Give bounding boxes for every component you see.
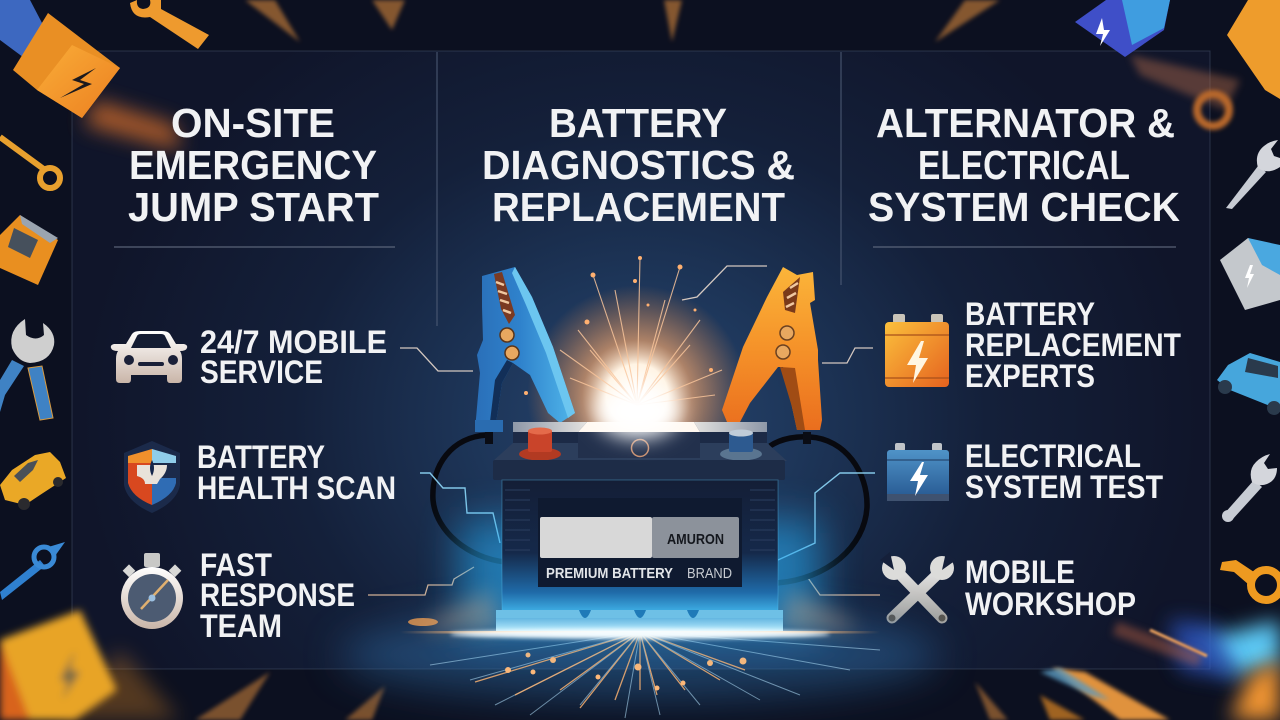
edge icons: left bbox=[0, 0, 209, 720]
icon: orange battery bbox=[885, 314, 949, 387]
heading: alternator and electrical system check: ELECTRICAL bbox=[918, 142, 1130, 188]
heading: on-site emergency jump start: JUMP START bbox=[128, 184, 379, 230]
text: fast response team: RESPONSE bbox=[200, 577, 355, 613]
heading: battery diagnostics and replacement: BATTERY bbox=[549, 100, 727, 146]
clamp: orange bbox=[722, 267, 822, 444]
battery center cap bbox=[578, 422, 700, 458]
text: 24/7 mobile service: 24/7 MOBILE bbox=[200, 324, 387, 360]
icon: key wrench bbox=[0, 137, 60, 188]
left feature list bbox=[111, 324, 396, 644]
bottom glow bbox=[408, 520, 860, 635]
battery label bbox=[540, 517, 739, 558]
text: mobile workshop: WORKSHOP bbox=[965, 586, 1136, 622]
battery brand text: PREMIUM BATTERY bbox=[546, 565, 673, 582]
icon: blue car bbox=[1217, 353, 1280, 415]
text: battery replacement experts bbox=[965, 296, 1181, 394]
icon: stopwatch bbox=[121, 553, 183, 629]
heading: battery diagnostics and replacement bbox=[482, 100, 795, 230]
battery brand text: BRAND bbox=[687, 565, 732, 582]
battery base bbox=[496, 610, 783, 632]
text: battery replacement experts: REPLACEMENT bbox=[965, 327, 1181, 363]
icon: orange ring wrench bbox=[1220, 560, 1280, 600]
icon: battery bbox=[1220, 238, 1280, 310]
edge icons: right bbox=[1075, 0, 1280, 600]
battery top blocks bbox=[493, 422, 787, 461]
icon: yellow car bbox=[0, 452, 66, 510]
icon: handheld tester bbox=[0, 215, 58, 285]
heading: on-site emergency jump start: ON-SITE bbox=[171, 100, 335, 146]
battery terminal: negative bbox=[720, 430, 762, 460]
text: mobile workshop bbox=[965, 554, 1136, 622]
column dividers bbox=[114, 52, 1176, 326]
glow base line bbox=[400, 629, 880, 639]
right feature list bbox=[880, 296, 1181, 622]
text: battery health scan: HEALTH SCAN bbox=[197, 470, 396, 506]
heading: alternator and electrical system check: SYSTEM CHECK bbox=[868, 184, 1180, 230]
heading: on-site emergency jump start bbox=[128, 100, 379, 230]
icon: orange box bbox=[1227, 0, 1280, 99]
circuit traces bbox=[368, 266, 880, 595]
text: fast response team: FAST bbox=[200, 547, 272, 583]
text: electrical system test: SYSTEM TEST bbox=[965, 469, 1163, 505]
icon: blurred ring bbox=[1197, 94, 1229, 126]
icon: wrench lower bbox=[1222, 454, 1277, 522]
icon: blue block bbox=[0, 0, 52, 66]
battery label panel bbox=[538, 498, 742, 587]
floor sparks bbox=[340, 610, 940, 718]
icon: car bbox=[111, 331, 187, 383]
text: mobile workshop: MOBILE bbox=[965, 554, 1075, 590]
text: battery health scan: BATTERY bbox=[197, 439, 325, 475]
flash core bbox=[596, 386, 680, 438]
icon: wrench top bbox=[130, 0, 209, 49]
heading: alternator and electrical system check: ALTERNATOR & bbox=[876, 100, 1175, 146]
battery lid bbox=[493, 460, 785, 480]
cables bbox=[433, 435, 867, 583]
text: battery replacement experts: BATTERY bbox=[965, 296, 1095, 332]
icon: blue battery bbox=[887, 443, 949, 501]
heading: battery diagnostics and replacement: DIAGNOSTICS & bbox=[482, 142, 795, 188]
sparks bbox=[524, 256, 747, 505]
central panel bbox=[72, 51, 1210, 669]
heading: on-site emergency jump start: EMERGENCY bbox=[129, 142, 377, 188]
icon: blue box bbox=[1075, 0, 1170, 57]
text: fast response team bbox=[200, 547, 355, 644]
icon: crossed tools bbox=[880, 552, 956, 622]
icon: blurred box bbox=[0, 610, 117, 720]
battery terminal: positive bbox=[519, 428, 561, 460]
battery label: AMURON bbox=[667, 531, 724, 548]
text: 24/7 mobile service: SERVICE bbox=[200, 354, 323, 390]
icon: wrench upper bbox=[1226, 140, 1280, 209]
icon: shield bbox=[124, 441, 180, 513]
text: fast response team: TEAM bbox=[200, 608, 282, 644]
clamp: blue bbox=[475, 267, 575, 444]
text: electrical system test bbox=[965, 438, 1163, 505]
battery bbox=[493, 422, 787, 632]
battery body bbox=[502, 480, 778, 612]
blue electricity bbox=[420, 473, 875, 560]
heading: battery diagnostics and replacement: REPLACEMENT bbox=[492, 184, 785, 230]
icon: pliers bbox=[0, 319, 54, 420]
text: battery replacement experts: EXPERTS bbox=[965, 358, 1095, 394]
icon: blue wrench bbox=[0, 542, 65, 600]
text: battery health scan bbox=[197, 439, 396, 506]
text: electrical system test: ELECTRICAL bbox=[965, 438, 1141, 474]
heading: alternator and electrical system check bbox=[868, 100, 1180, 230]
icon: orange cube bbox=[13, 13, 120, 118]
text: 24/7 mobile service bbox=[200, 324, 387, 390]
